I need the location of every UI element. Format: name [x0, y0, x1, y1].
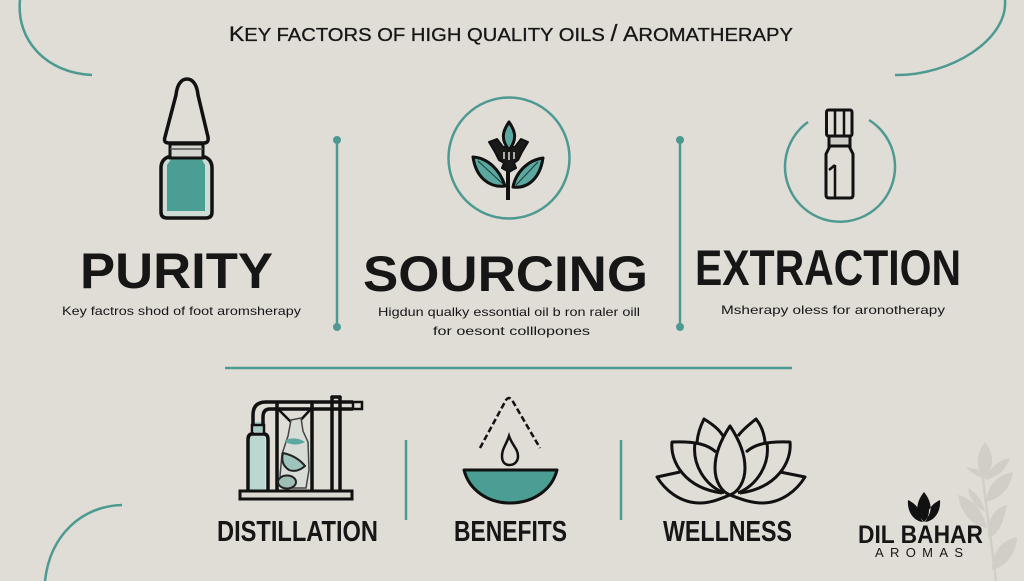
text: sourcing caption: [378, 305, 640, 338]
text: sourcing caption: Higdun qualky essontial oil b ron raler oill: [378, 305, 640, 319]
logo subtitle: AROMAS: [875, 545, 963, 560]
title: KEY FACTORS OF HIGH QUALITY OILS / AROMATHERAPY: [229, 20, 793, 46]
icon: distillation apparatus: [240, 396, 362, 499]
text: extraction caption: Msherapy oless for aronotherapy: [721, 303, 945, 317]
logo: Dil Bahar Aromas: [858, 492, 983, 560]
heading: purity: PURITY: [80, 243, 273, 299]
decorative leaf sprig: [958, 442, 1017, 581]
divider: left with dots: [333, 136, 341, 331]
logo name: DIL BAHAR: [858, 521, 983, 549]
corner arc: bottom left: [45, 505, 122, 581]
text: purity caption: Key factros shod of foot aromsherapy: [62, 304, 301, 318]
icon: purity bottle: [161, 79, 212, 218]
icon: sourcing plant in circle: [448, 98, 570, 218]
heading: distillation: DISTILLATION: [217, 516, 378, 548]
icon: logo lotus: [908, 492, 940, 522]
icon: benefits bowl with drop: [464, 398, 557, 503]
icon: wellness lotus: [657, 419, 805, 503]
bottom divider: right: [620, 440, 622, 520]
heading: benefits: BENEFITS: [454, 516, 567, 548]
heading: sourcing: SOURCING: [363, 246, 648, 302]
horizontal divider: [225, 367, 792, 369]
heading: extraction: EXTRACTION: [695, 240, 961, 296]
icon: extraction vial in open circle: [785, 110, 895, 222]
heading: wellness: WELLNESS: [663, 516, 792, 548]
corner arc: top left: [20, 0, 92, 75]
bottom divider: left: [405, 440, 407, 520]
text: sourcing caption: for oesont colllopones: [433, 324, 590, 338]
corner arc: top right: [895, 0, 1005, 75]
divider: right with dots: [676, 136, 684, 331]
